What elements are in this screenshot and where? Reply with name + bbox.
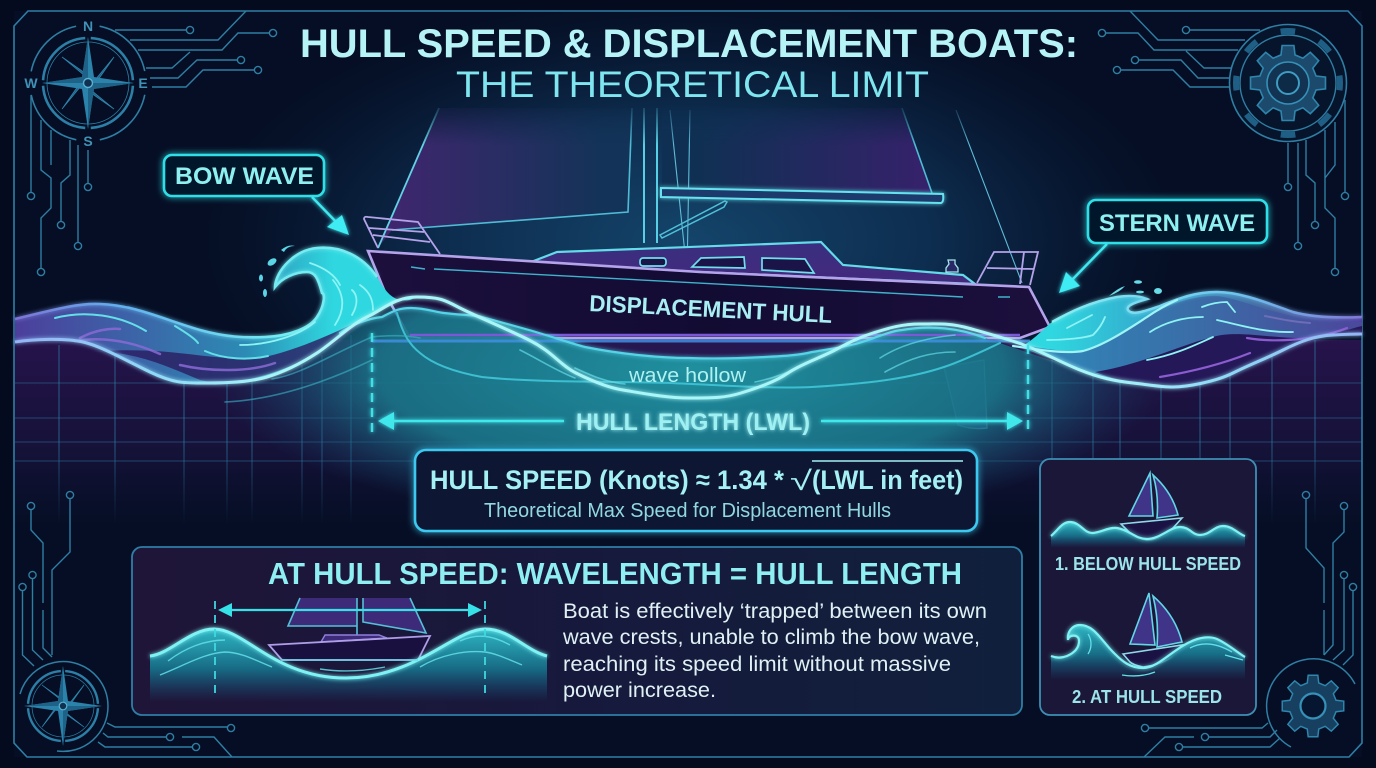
circuit traces: top right: [1098, 11, 1349, 276]
mini wave: [150, 629, 547, 702]
circuit traces: top left: [27, 11, 277, 276]
icon: boat at hull speed: [1051, 593, 1245, 680]
callout: stern wave: STERN WAVE: [1099, 210, 1255, 237]
rub rail: [411, 267, 1010, 297]
keel: [944, 360, 987, 429]
bow pulpit: [364, 217, 440, 254]
icon: compass top left: [24, 18, 148, 149]
wave lines along the hull: [225, 308, 1085, 402]
wave hollow label: wave hollow: [628, 365, 747, 387]
waterline bands: [372, 335, 1030, 341]
mini boat between crests: [269, 598, 430, 660]
stern wave: [1013, 280, 1362, 387]
explanation text: Boat is effectively ‘trapped’ between its own: [563, 600, 987, 623]
title: [300, 22, 1078, 105]
icon: compass top left: E: [138, 75, 148, 91]
main wave line: [15, 297, 1362, 398]
formula text: √: [790, 466, 812, 496]
wavelength arrow: [215, 601, 485, 693]
explanation text: power increase.: [563, 679, 716, 702]
stern spray: [1109, 280, 1162, 296]
formula text: (LWL in feet): [812, 465, 963, 495]
label: below hull speed: 1. BELOW HULL SPEED: [1055, 554, 1241, 574]
icon: compass bottom left: [20, 662, 108, 751]
explanation text: wave crests, unable to climb the bow wave,: [562, 626, 980, 649]
icon: boat below hull speed: [1051, 473, 1245, 548]
icon: gear bottom right: [1267, 659, 1355, 747]
wave highlights: [55, 263, 373, 370]
arrow: bow wave: [312, 197, 349, 235]
foresail: [378, 108, 632, 248]
panel: speed comparison: [1040, 459, 1256, 715]
cabin windows: [640, 257, 814, 273]
panel heading: AT HULL SPEED: WAVELENGTH = HULL LENGTH: [268, 556, 962, 591]
boom: [661, 188, 943, 203]
hull: [368, 251, 1050, 338]
icon: compass top left: W: [24, 75, 38, 91]
callout: bow wave: BOW WAVE: [175, 163, 314, 190]
callout: bow wave: [164, 155, 324, 196]
stern highlights: [1013, 300, 1347, 377]
label: at hull speed: 2. AT HULL SPEED: [1072, 687, 1222, 707]
icon: compass top left: N: [83, 18, 93, 34]
icon: gear top right: [1230, 24, 1346, 142]
panel: at hull speed: [132, 547, 1022, 715]
circuit traces: bottom right: [1141, 491, 1357, 757]
mast and rigging: [644, 108, 1022, 283]
formula text: HULL SPEED (Knots) ≈ 1.34 *: [430, 465, 784, 495]
spray droplets: [259, 246, 295, 297]
icon: compass top left: S: [83, 133, 93, 149]
hull length dimension: HULL LENGTH (LWL): [576, 409, 810, 436]
boom vang: [660, 201, 727, 238]
stern pulpit: [977, 252, 1038, 285]
cabin: [531, 242, 975, 284]
water under the hull: [238, 309, 1141, 490]
panel: formula: [415, 450, 977, 531]
formula subtitle: Theoretical Max Speed for Displacement Hulls: [484, 500, 891, 522]
arrow: stern wave: [1059, 244, 1107, 293]
hull label: DISPLACEMENT HULL: [589, 290, 833, 328]
explanation text: [562, 600, 987, 702]
winch: [946, 260, 958, 272]
wave crest rim: [15, 248, 377, 337]
callout: stern wave: [1088, 200, 1267, 243]
circuit traces: bottom left: [19, 491, 235, 757]
formula text: [430, 461, 963, 496]
mainsail: [662, 108, 932, 193]
bow wave: [15, 246, 417, 383]
title: THE THEORETICAL LIMIT: [456, 64, 929, 105]
title: HULL SPEED & DISPLACEMENT BOATS:: [300, 22, 1078, 66]
explanation text: reaching its speed limit without massive: [563, 653, 951, 676]
hull length dimension: [372, 333, 1028, 436]
sailboat: [364, 108, 1050, 429]
